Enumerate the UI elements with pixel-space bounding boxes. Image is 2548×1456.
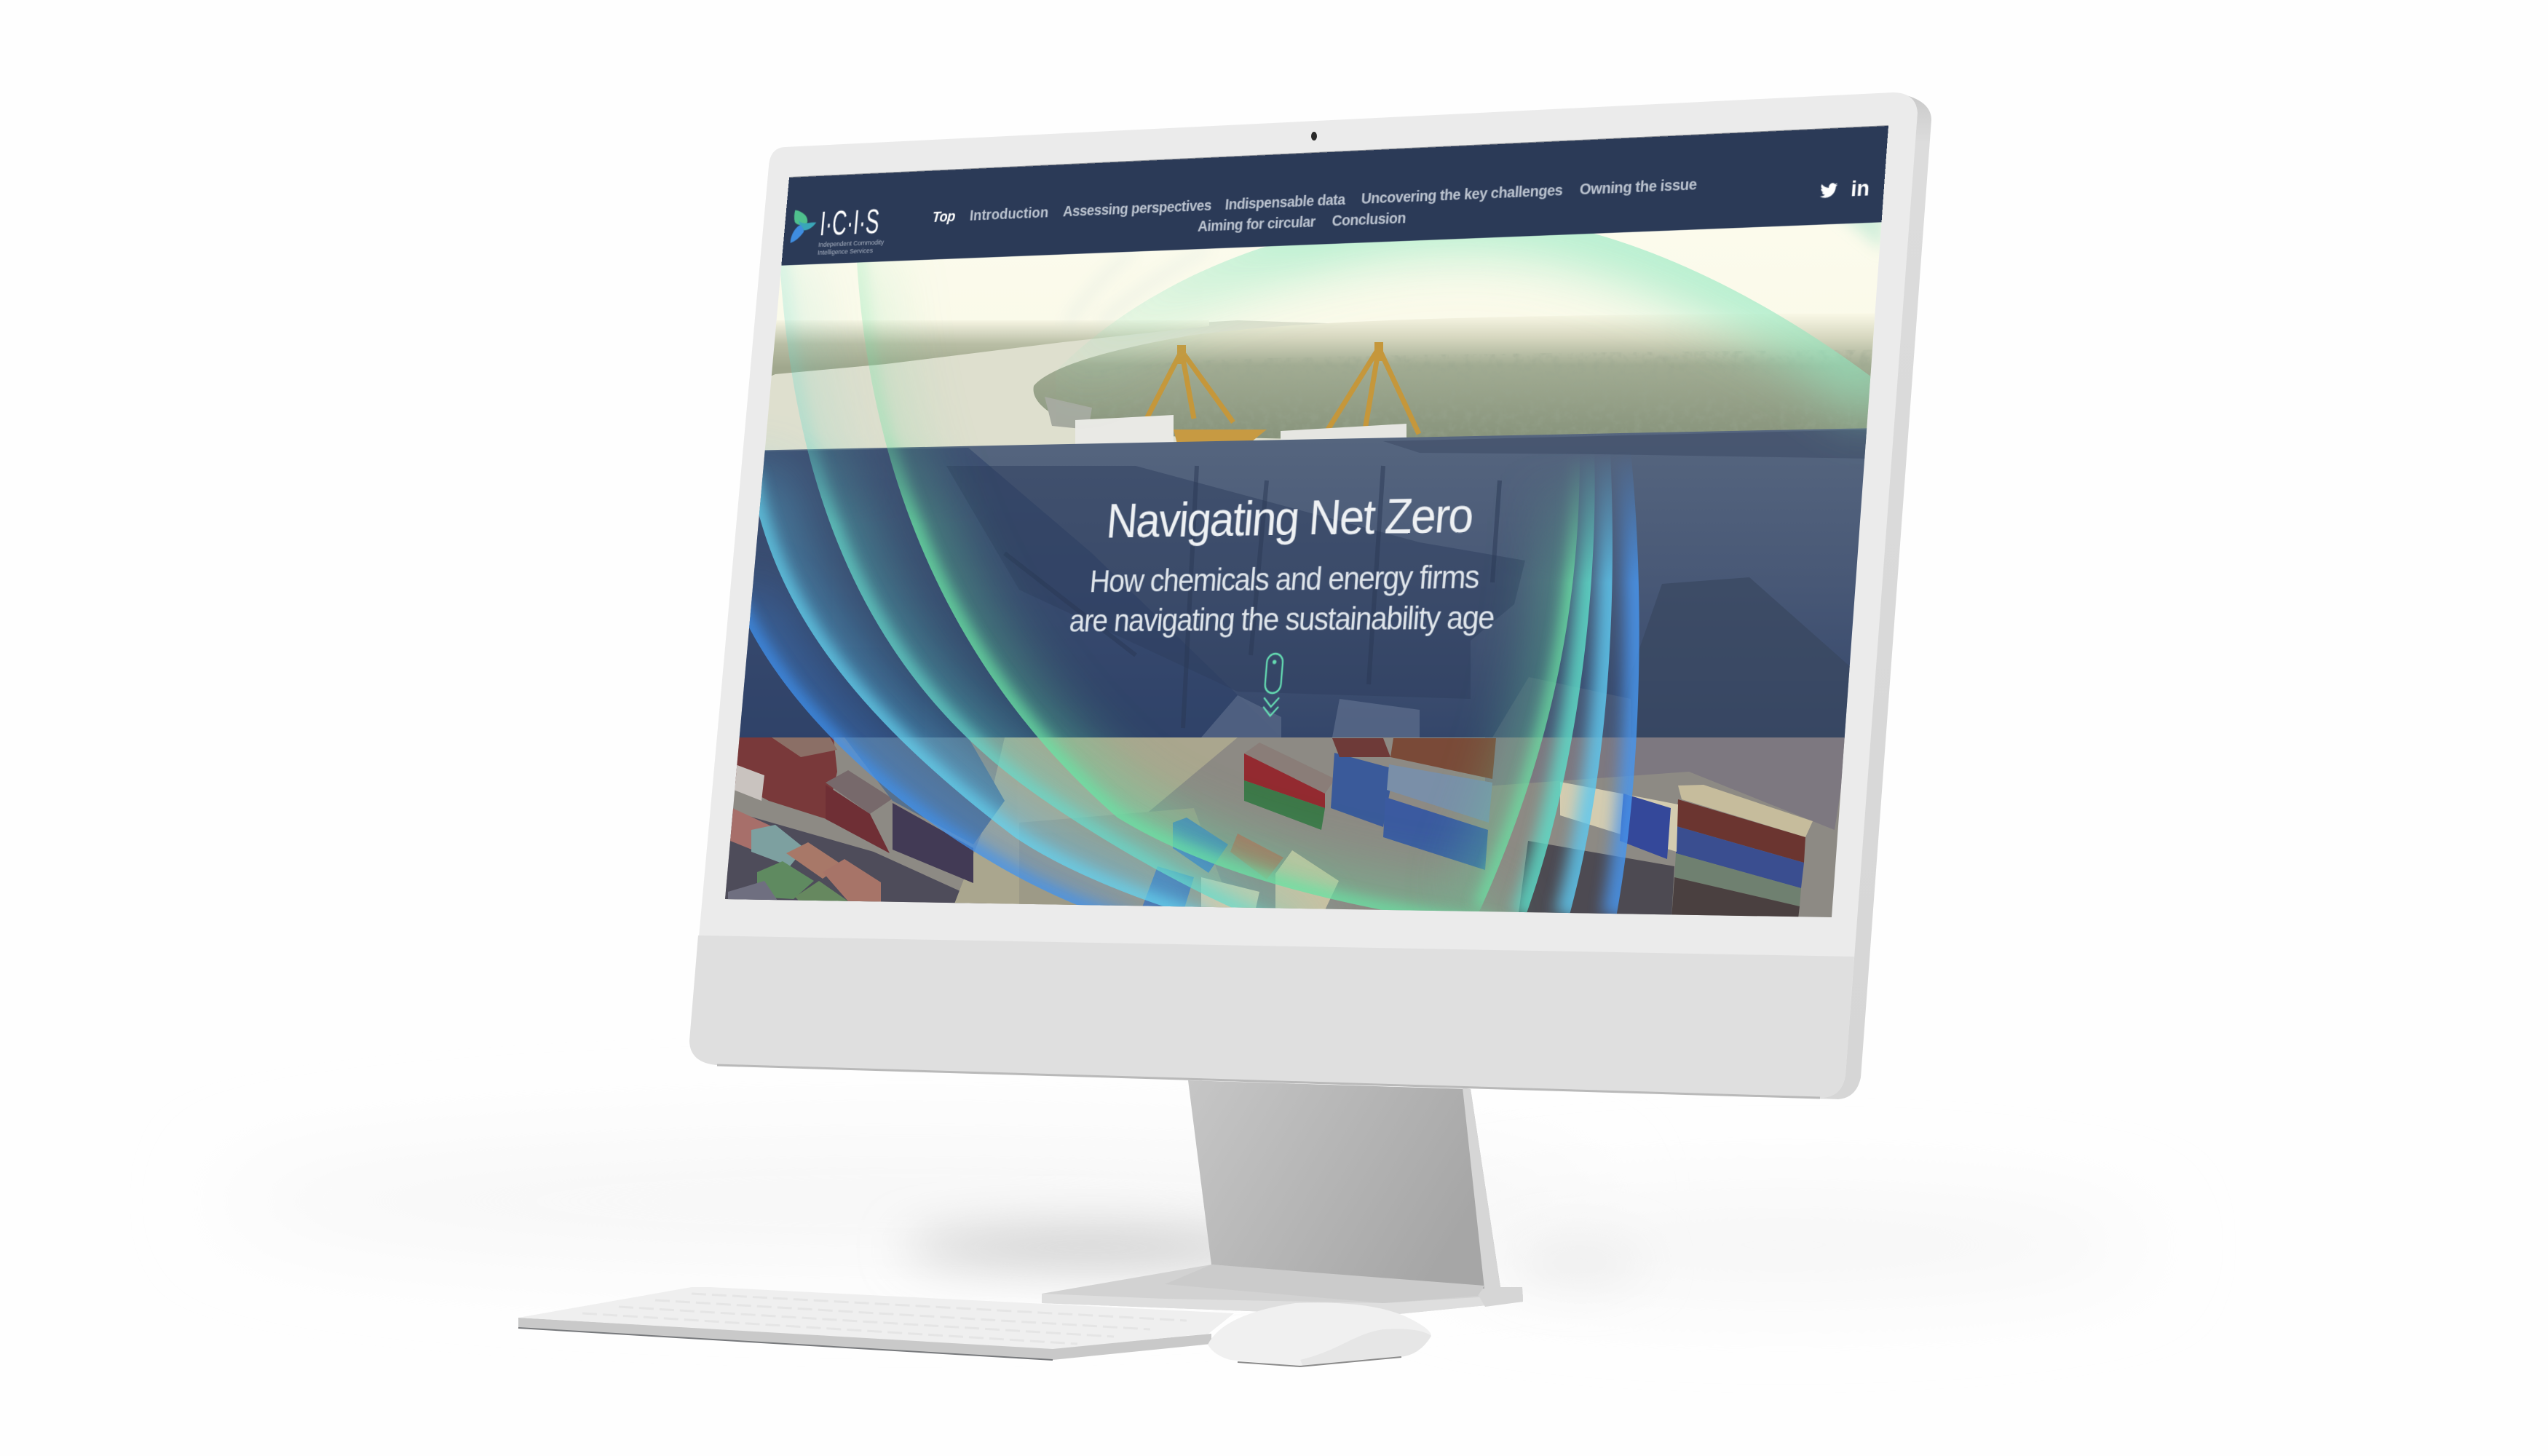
forest island	[1034, 313, 1907, 444]
icon: twitter	[1819, 181, 1838, 199]
navy band	[728, 428, 1878, 738]
right arcs fading upward	[1481, 451, 1639, 917]
navigation links: Top	[932, 208, 956, 226]
monitor side edge	[1747, 92, 1931, 1099]
far shore city	[772, 320, 1209, 376]
left arc cyan	[750, 473, 1208, 921]
hero title: Navigating Net Zero	[1104, 488, 1474, 548]
logo wordmark: I·C·I·S	[818, 202, 881, 243]
central containers	[1136, 738, 1496, 925]
navigation bar	[781, 126, 1888, 266]
navigation links: Conclusion	[1332, 210, 1406, 230]
stand with base	[1042, 1080, 1523, 1314]
left arc blue	[735, 597, 1136, 925]
navigation links	[928, 173, 1700, 250]
left containers	[728, 737, 1005, 903]
navigation links: Uncovering the key challenges	[1361, 181, 1563, 207]
hero subtitle	[974, 555, 1601, 641]
left arcs teal and green, fading in the sky	[779, 248, 1500, 939]
logo tagline	[818, 239, 885, 257]
navigation links: Introduction	[969, 204, 1049, 224]
navigation links: Indispensable data	[1224, 191, 1346, 213]
website screen overlay in perspective	[782, 126, 1888, 718]
small ship on the river	[1045, 397, 1092, 430]
icon: ICIS triskele	[790, 210, 817, 243]
river	[764, 320, 1326, 450]
monitor chin	[689, 935, 1854, 1098]
mint gradient in the top-right corner	[1835, 207, 1886, 251]
sky	[776, 134, 1888, 323]
asphalt and tan quay	[721, 737, 1849, 925]
navigation links: Aiming for circular	[1197, 213, 1316, 235]
right containers	[1518, 782, 1813, 919]
logo: ICIS	[790, 202, 885, 257]
icon: scroll mouse with chevrons	[1258, 651, 1287, 721]
navigation links: Assessing perspectives	[1062, 197, 1212, 220]
floor shadow	[218, 1139, 2148, 1289]
hero subtitle: are navigating the sustainability age	[1068, 599, 1495, 638]
container yard ground	[713, 737, 1849, 927]
mockup scene: floor shadow, computer body, screen photo	[518, 92, 1931, 1367]
webcam	[1311, 132, 1317, 141]
mouse	[1208, 1302, 1431, 1366]
icon: linkedin: in	[1850, 176, 1870, 201]
navigation links: Owning the issue	[1579, 175, 1698, 198]
forest texture	[1396, 349, 1865, 360]
monitor front with bezel	[689, 92, 1918, 1098]
faint fan arcs behind dome	[1067, 248, 1208, 324]
keyboard	[518, 1287, 1234, 1360]
hero subtitle: How chemicals and energy firms	[1088, 559, 1480, 598]
band underlay shapes	[728, 430, 1871, 737]
logo tagline: Independent Commodity	[818, 239, 885, 249]
port cranes	[1147, 342, 1419, 434]
sky dome arc	[1056, 215, 1893, 393]
logo tagline: Intelligence Services	[818, 247, 873, 257]
white deck blocks	[1075, 415, 1406, 455]
screen photo: port, river, containers	[713, 124, 1907, 939]
